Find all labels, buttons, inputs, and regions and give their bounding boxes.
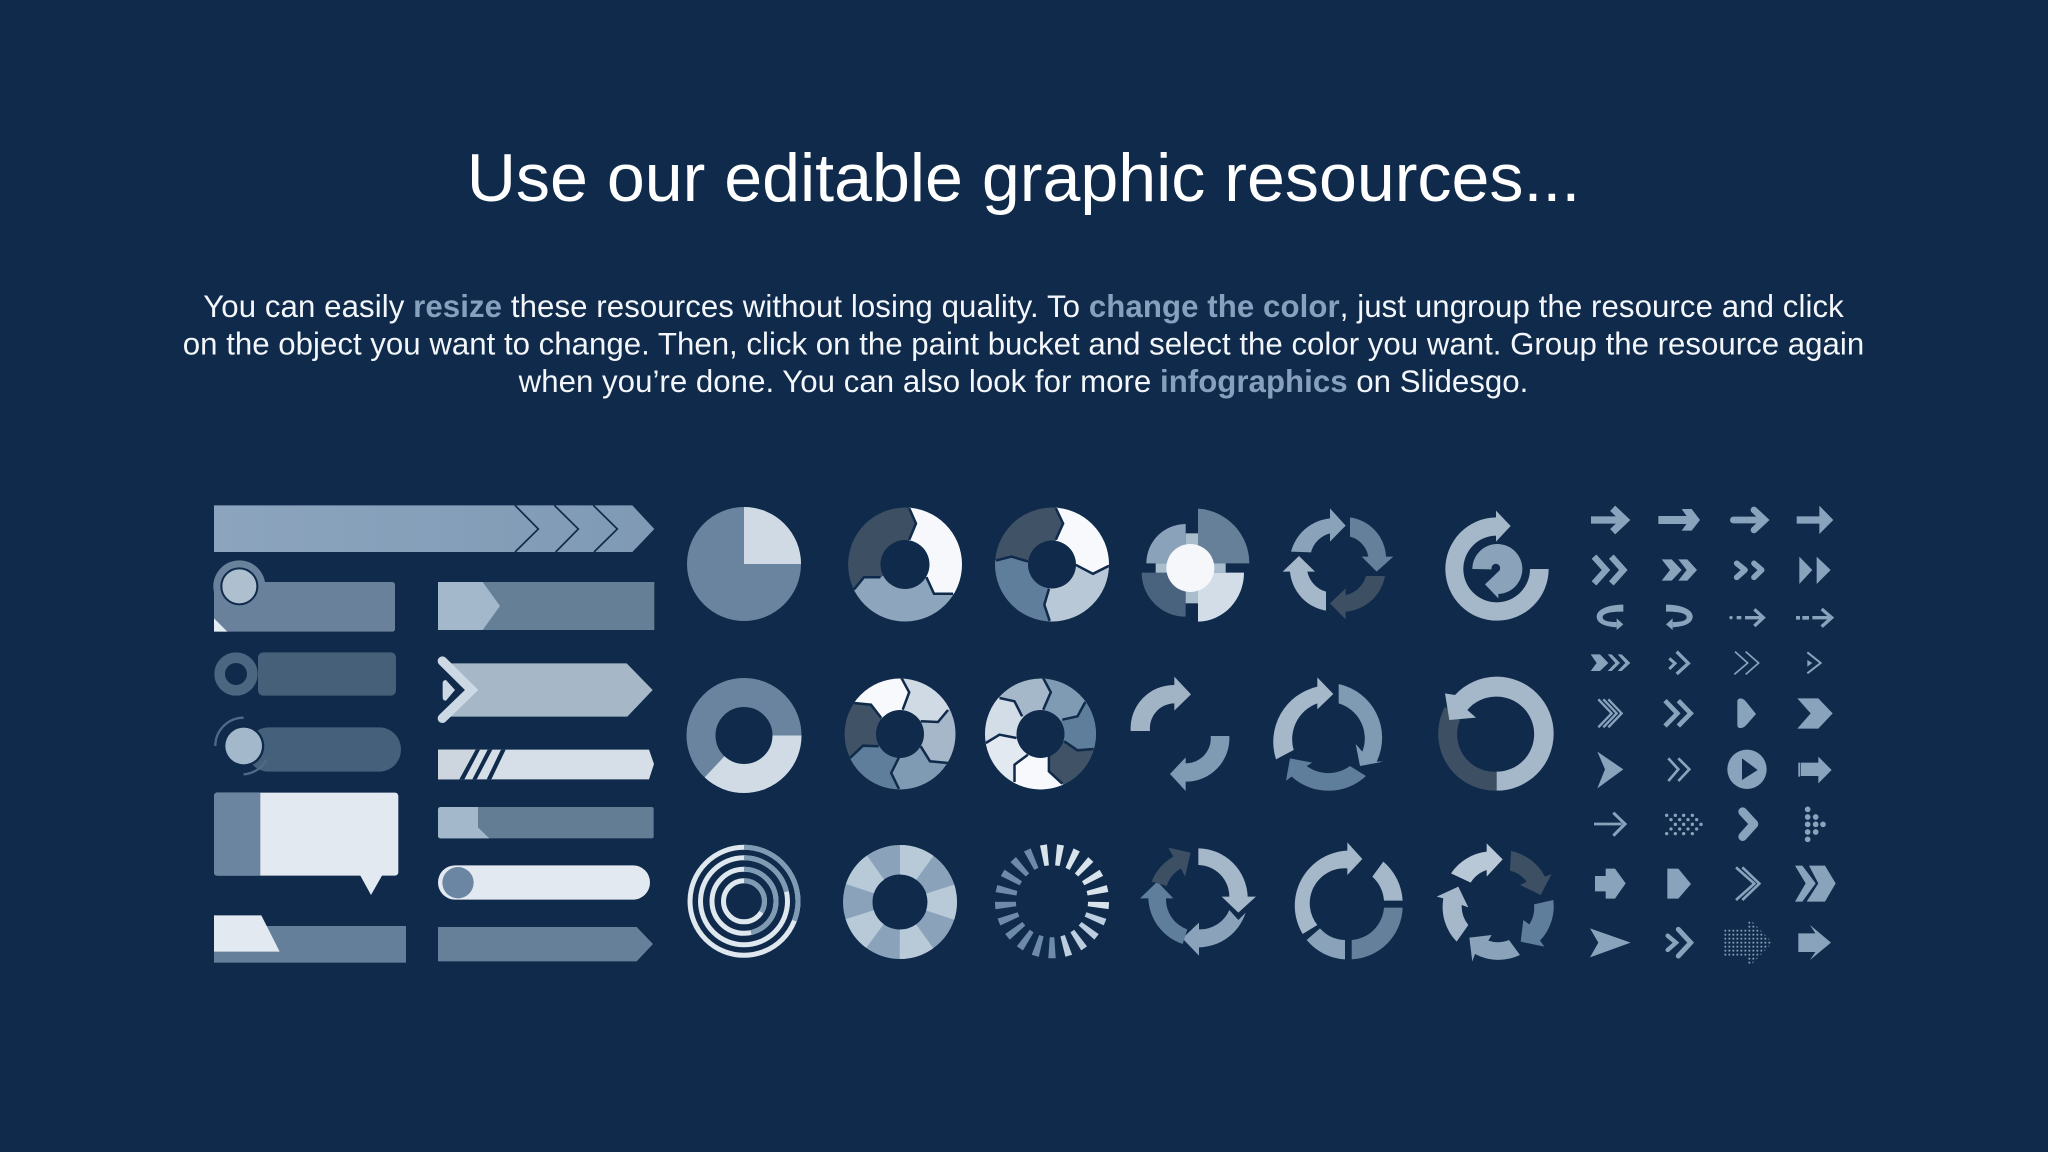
arrows: row 8 [1595,866,1836,902]
chart: concentric rings [690,847,798,955]
chart: four-part donut [995,508,1109,622]
icon: ring with return arrow [1438,677,1554,791]
banner: white pill with dot [438,865,650,900]
chart: three-part donut [848,508,962,622]
arrows: row 3 [1597,605,1832,630]
chart: seven-part donut [985,678,1096,790]
icon: five-arrow cycle [1437,843,1554,962]
chart: pie quarter [687,507,801,621]
panel: arrow icon set [1590,506,1836,965]
banner: pill with circle [215,718,401,774]
banner: notched bar [438,807,654,838]
arrows: row 1 [1591,506,1833,534]
arrows: row 2 [1594,557,1831,584]
banner: striped ribbon [438,750,654,779]
body text [183,289,1864,399]
chart: radial tick ring [995,844,1109,958]
banner: tab bar [214,915,406,963]
icon: four-arrow loop [1140,848,1256,956]
panel: banners [213,505,654,963]
icon: segmented ring with arrow [1295,842,1403,959]
arrows: row 4 [1591,652,1821,674]
title: Use our editable graphic resources... [467,140,1580,216]
arrows: row 7 [1594,806,1826,842]
icon: four-arrow cycle [1283,508,1393,619]
icon: two-arrow cycle [1131,677,1229,791]
banner: long arrow with chevrons [214,505,654,552]
chart: two-part donut [701,692,787,778]
arrows: row 5 [1598,698,1833,729]
chart: ten-part donut [858,860,942,944]
arrows: row 9 [1590,921,1831,965]
icon: three-arrow cycle [1273,677,1383,791]
icon: spiral arrow [1445,511,1549,621]
banner: ring and rounded bar [220,652,396,696]
chart: quadrant wheel [1142,509,1249,622]
banner: arrow block [438,582,654,630]
banner: tab with circle [213,560,395,632]
body text: when you’re done. You can also look for more infographics on Slidesgo. [518,364,1528,399]
banner: chevron arrow [442,661,653,718]
body text: on the object you want to change. Then, click on the paint bucket and select the color you want. Group the resource again [183,326,1864,362]
chart: six-part donut [844,678,956,790]
body text: You can easily resize these resources without losing quality. To change the color, just ungroup the resource and click [203,289,1844,324]
arrows: row 6 [1597,750,1832,789]
panel: circular arrows [1131,508,1554,962]
banner: plain arrow [438,927,653,961]
callout: speech bubble [214,793,398,895]
